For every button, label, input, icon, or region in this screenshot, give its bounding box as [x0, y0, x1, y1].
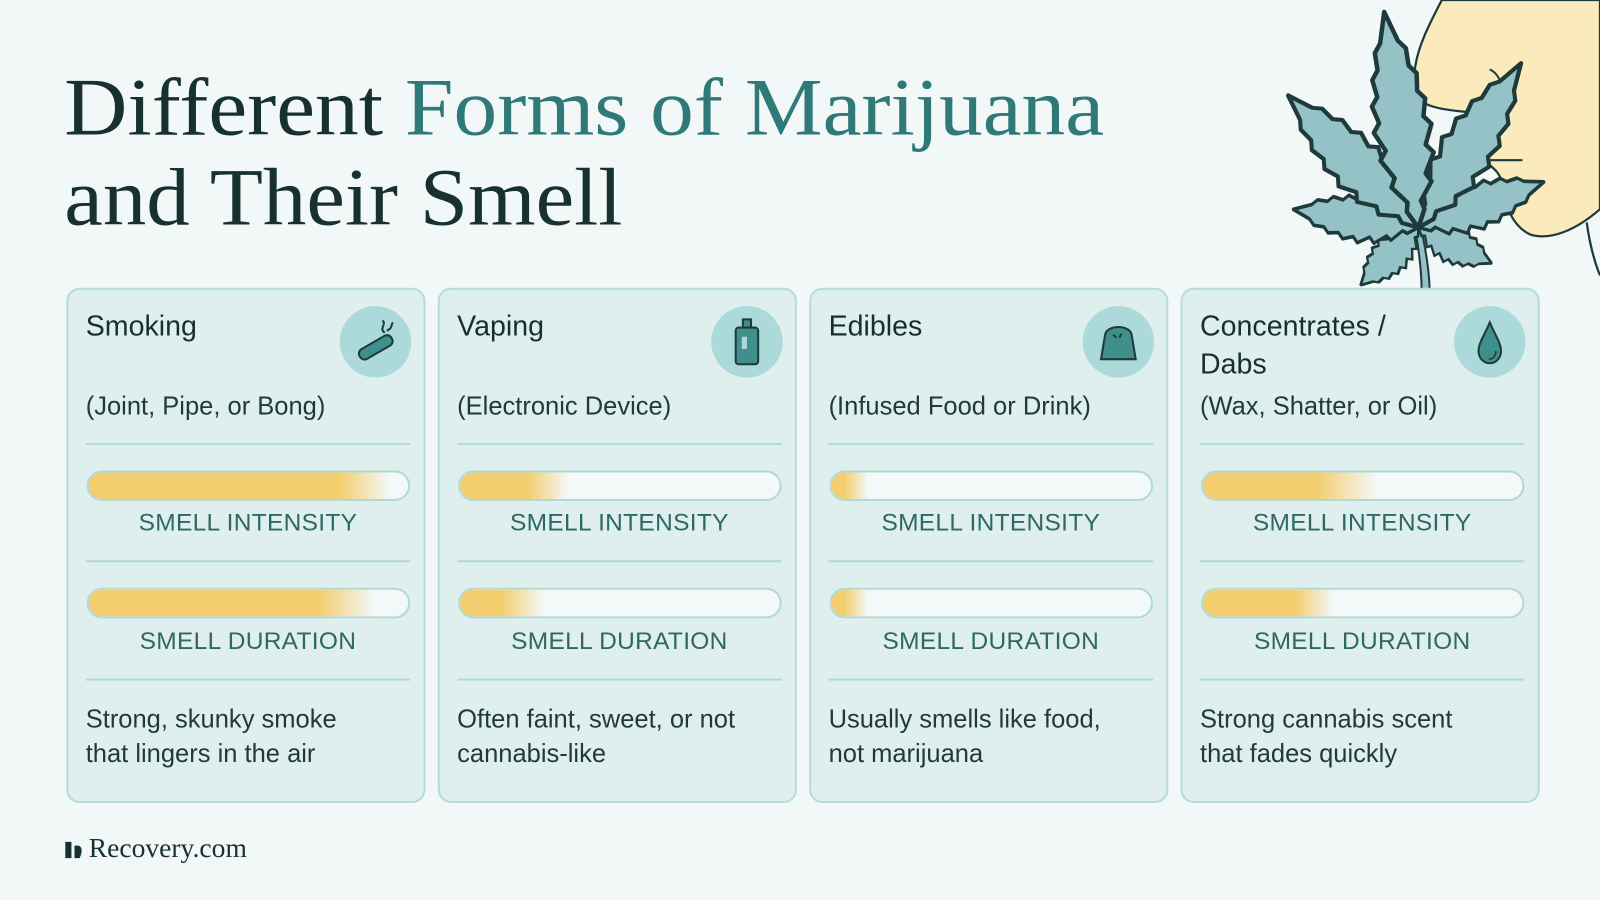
- panel: edibles: Usually smells like food,: [829, 705, 1101, 734]
- title: and Their Smell: [64, 151, 622, 242]
- panel: vaping: Often faint, sweet, or not: [457, 705, 735, 734]
- face: [1413, 0, 1600, 276]
- bar: intensity: [87, 470, 410, 501]
- panel: edibles: SMELL DURATION: [883, 628, 1099, 655]
- panel: concentrates: SMELL INTENSITY: [1253, 509, 1472, 537]
- title: [64, 62, 1104, 242]
- icon: joint: [340, 306, 411, 378]
- icon: drop: [1454, 306, 1525, 378]
- title: Different Forms of Marijuana: [64, 62, 1104, 153]
- icon: vape: [711, 306, 783, 378]
- bar: intensity: [1201, 470, 1524, 501]
- panel: edibles: SMELL INTENSITY: [881, 509, 1100, 537]
- panel: concentrates: that fades quickly: [1200, 740, 1397, 768]
- panel: smoking: SMELL DURATION: [140, 628, 356, 655]
- panel: concentrates: Dabs: [1200, 348, 1267, 380]
- panel: concentrates: Concentrates /: [1200, 310, 1386, 342]
- bar: duration: [1201, 588, 1524, 618]
- bar: intensity: [458, 470, 782, 501]
- panel: smoking: (Joint, Pipe, or Bong): [86, 392, 325, 420]
- panel: smoking: [66, 288, 426, 803]
- panel: edibles: (Infused Food or Drink): [829, 392, 1091, 420]
- panel: concentrates: [1181, 288, 1540, 803]
- panel: edibles: not marijuana: [829, 740, 983, 768]
- icon: gummy: [1083, 306, 1154, 378]
- panel: vaping: [438, 288, 797, 803]
- panel: smoking: Strong, skunky smoke: [86, 705, 337, 734]
- panel: edibles: [809, 288, 1168, 803]
- bar: duration: [830, 588, 1153, 618]
- panel: vaping: cannabis-like: [457, 740, 606, 768]
- cannabis leaf: [1268, 7, 1552, 303]
- logo: Recovery.com: [89, 833, 247, 863]
- panel: smoking: Smoking: [86, 310, 197, 342]
- panel: smoking: SMELL INTENSITY: [139, 509, 357, 537]
- bar: intensity: [830, 470, 1153, 501]
- panel: vaping: Vaping: [457, 310, 544, 342]
- panel: concentrates: Strong cannabis scent: [1200, 705, 1452, 734]
- bar: duration: [458, 588, 782, 618]
- panel: smoking: that lingers in the air: [86, 740, 315, 768]
- panel: vaping: (Electronic Device): [457, 392, 671, 420]
- panel: concentrates: SMELL DURATION: [1254, 628, 1471, 655]
- panel: vaping: SMELL DURATION: [511, 628, 728, 655]
- panel: concentrates: (Wax, Shatter, or Oil): [1200, 392, 1437, 420]
- panel: edibles: Edibles: [829, 310, 922, 342]
- panel: vaping: SMELL INTENSITY: [510, 509, 729, 537]
- bar: duration: [87, 588, 410, 618]
